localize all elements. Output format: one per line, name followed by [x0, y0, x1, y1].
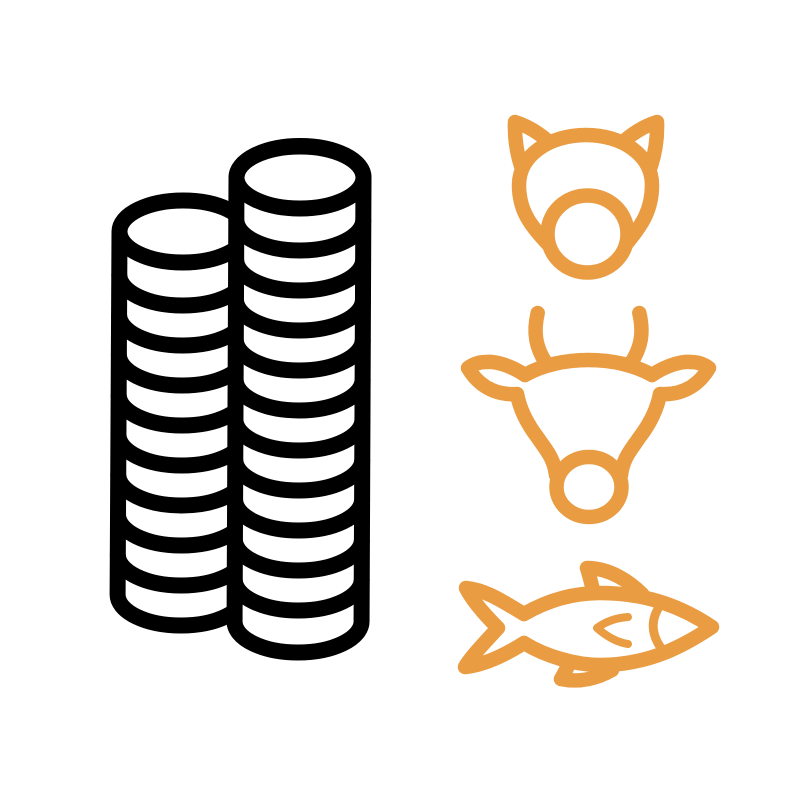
icon: fish: [465, 568, 712, 680]
icon: pig head: [515, 122, 657, 272]
icon: cow head: [468, 313, 709, 517]
icon: left coin stack: [117, 200, 247, 626]
icon: right coin stack: [234, 146, 364, 652]
